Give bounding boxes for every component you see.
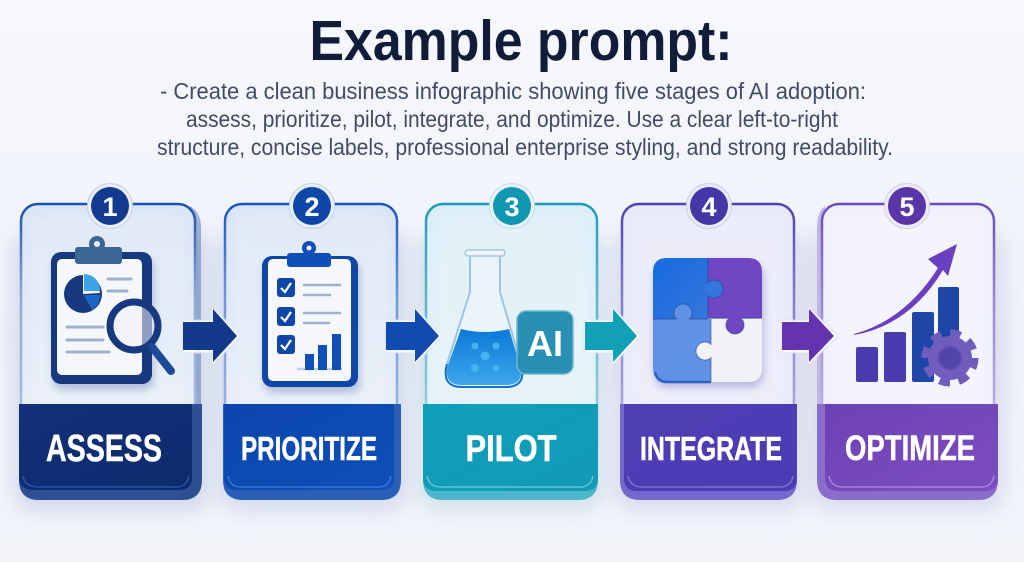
card footer [423, 404, 598, 500]
card footer [223, 404, 401, 500]
label: OPTIMIZE [845, 429, 975, 468]
description text: structure, concise labels, professional enterprise styling, and strong readability. [157, 134, 893, 160]
title: Example prompt: [310, 9, 732, 73]
icon: checklist clipboard [262, 241, 360, 393]
arrow: integrate to optimize [781, 306, 838, 366]
number badge [490, 184, 534, 228]
number badge: 4 [701, 192, 717, 222]
icon: growth chart with gear [854, 244, 974, 382]
number badge [290, 184, 334, 228]
icon: puzzle pieces [653, 258, 764, 388]
number badge: 1 [102, 192, 118, 222]
number badge [686, 184, 732, 228]
card footer [620, 404, 797, 500]
description text [157, 78, 893, 160]
card footer [19, 404, 202, 500]
number badge [884, 184, 930, 228]
icon: clipboard with magnifier [51, 236, 171, 390]
arrow: assess to prioritize [183, 306, 241, 366]
icon: flask with AI tile [446, 250, 573, 387]
arrow: prioritize to pilot [386, 306, 443, 366]
panel: integrate [614, 184, 804, 512]
icon: flask with AI tile: AI [527, 323, 563, 364]
description text: assess, prioritize, pilot, integrate, and optimize. Use a clear left-to-right [186, 106, 839, 132]
label: ASSESS [46, 428, 162, 470]
description text: - Create a clean business infographic showing five stages of AI adoption: [160, 78, 866, 104]
label: INTEGRATE [640, 430, 782, 467]
panel: assess [14, 184, 210, 512]
number badge: 5 [899, 192, 915, 222]
number badge [88, 184, 132, 228]
arrow: pilot to integrate [584, 306, 641, 366]
number badge: 3 [504, 192, 520, 222]
panel: pilot [418, 184, 604, 512]
panel: prioritize [218, 184, 408, 512]
number badge: 2 [304, 192, 320, 222]
card footer [817, 404, 998, 500]
label: PRIORITIZE [241, 430, 377, 467]
label: PILOT [466, 428, 557, 469]
panel: optimize [810, 184, 1004, 512]
